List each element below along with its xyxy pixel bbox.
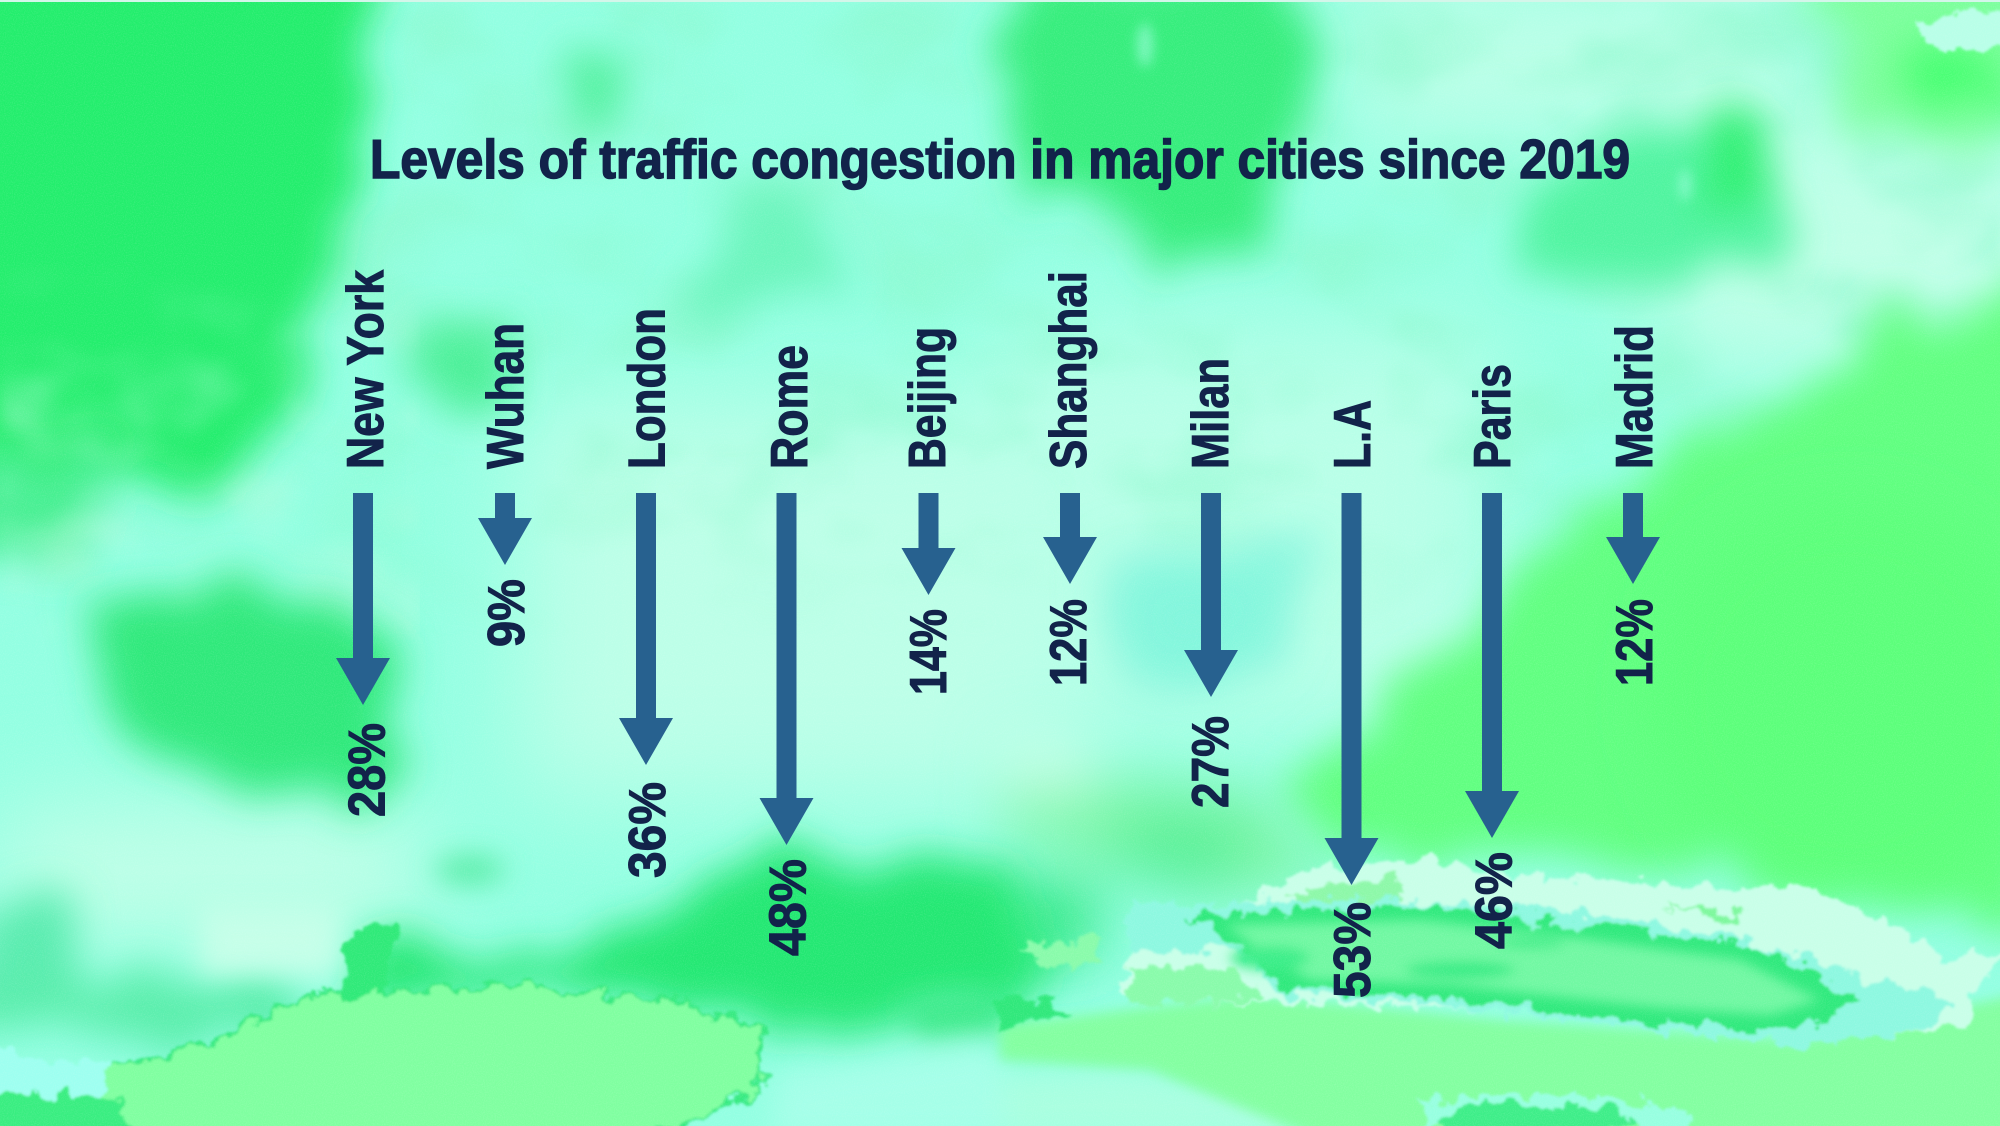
column: London 36%	[618, 308, 677, 878]
city label: New York: New York	[337, 270, 395, 469]
value: 46%: 46%	[1466, 852, 1524, 949]
column: Shanghai 12%	[1040, 271, 1098, 686]
column: Rome 48%	[760, 345, 819, 956]
arrow: Beijing	[902, 493, 956, 595]
arrow: London	[619, 493, 673, 765]
title: Levels of traffic congestion in major cities since 2019	[370, 128, 1630, 190]
arrow: Rome	[760, 493, 814, 845]
value: 36%: 36%	[619, 782, 677, 878]
city label: Rome: Rome	[761, 345, 819, 469]
value: 27%: 27%	[1182, 716, 1240, 808]
value: 48%: 48%	[760, 859, 818, 956]
top-right cloud highlight	[1915, 10, 2000, 50]
city label: Madrid: Madrid	[1606, 325, 1664, 469]
city label: Paris: Paris	[1464, 364, 1522, 469]
value: 28%: 28%	[338, 723, 396, 817]
column: Beijing 14%	[899, 327, 958, 695]
city label: L.A: L.A	[1324, 400, 1382, 469]
patches on left mass	[0, 295, 420, 634]
arrow: Paris	[1465, 493, 1519, 838]
column: New York 28%	[336, 270, 396, 817]
lime base right	[1000, 990, 2000, 1126]
arrow: New York	[336, 493, 390, 705]
column: Paris 46%	[1464, 364, 1524, 949]
arrow: L.A	[1324, 493, 1378, 885]
city label: Milan: Milan	[1182, 358, 1240, 469]
value: 12%: 12%	[1606, 599, 1664, 686]
arrow: Milan	[1184, 493, 1238, 697]
city label: London: London	[618, 308, 676, 469]
lime lower-left ground	[0, 925, 760, 1126]
left blob and bottom band	[0, 575, 1030, 1040]
value: 14%: 14%	[900, 609, 958, 695]
city label: Beijing: Beijing	[899, 327, 957, 469]
column: Wuhan 9%	[477, 323, 536, 647]
value: 12%: 12%	[1040, 599, 1098, 686]
arrow: Madrid	[1606, 493, 1660, 584]
city label: Shanghai: Shanghai	[1040, 271, 1098, 469]
lime mass, lower right	[1300, 280, 2000, 960]
bottom small cloud	[1415, 1095, 1690, 1126]
value: 53%: 53%	[1324, 902, 1382, 998]
city label: Wuhan: Wuhan	[477, 323, 535, 469]
column: Milan 27%	[1182, 358, 1240, 808]
value: 9%: 9%	[478, 579, 536, 647]
arrow: Shanghai	[1043, 493, 1097, 584]
arrow: Wuhan	[478, 493, 532, 565]
column: Madrid 12%	[1606, 325, 1664, 686]
column: L.A 53%	[1324, 400, 1382, 998]
cloud with ring	[1120, 860, 2000, 1045]
bottom aqua	[770, 990, 1300, 1126]
